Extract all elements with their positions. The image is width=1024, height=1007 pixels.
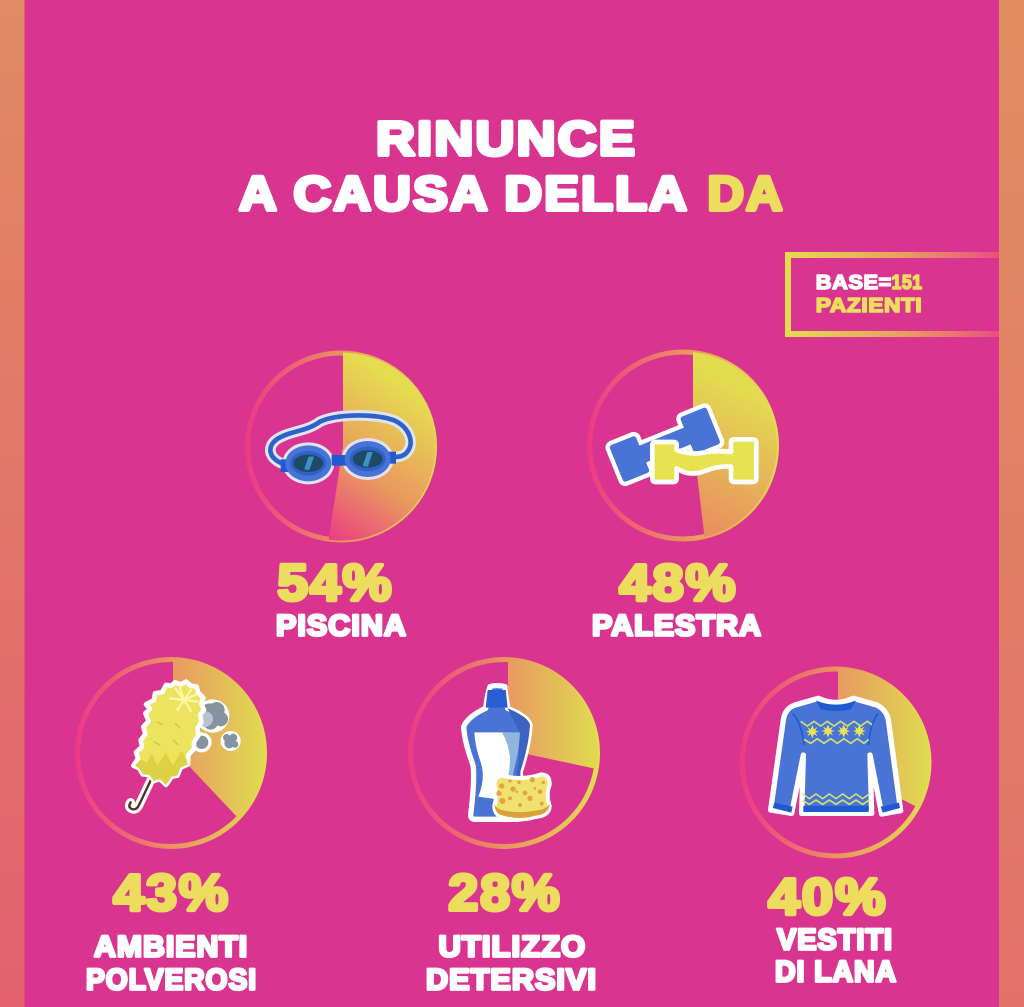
icon: swimming goggles bbox=[270, 415, 411, 484]
label ambienti polverosi bbox=[86, 931, 257, 997]
pie chart 28% bbox=[410, 659, 598, 846]
percentage 28%: 28% bbox=[448, 864, 562, 921]
label utilizzo detersivi: UTILIZZO bbox=[438, 931, 586, 964]
pie chart 43% bbox=[78, 659, 265, 846]
label utilizzo detersivi: DETERSIVI bbox=[426, 964, 597, 997]
panel: ambienti polverosi bbox=[78, 659, 265, 997]
label ambienti polverosi: POLVEROSI bbox=[86, 964, 257, 997]
right side bar bbox=[999, 0, 1024, 1007]
icon: wool sweater bbox=[771, 698, 901, 814]
percentage 43%: 43% bbox=[114, 864, 230, 921]
pie chart 54% bbox=[248, 352, 435, 540]
callout: base pazienti: BASE= bbox=[816, 271, 892, 294]
pie chart 48% bbox=[590, 352, 777, 539]
panel: palestra bbox=[590, 352, 777, 643]
panel: piscina bbox=[248, 352, 435, 643]
label vestiti di lana: DI LANA bbox=[775, 956, 897, 989]
icon: detergent bottle and sponge bbox=[464, 685, 550, 819]
title: RINUNCE bbox=[376, 113, 637, 166]
percentage 48%: 48% bbox=[620, 554, 738, 611]
icon: feather duster bbox=[129, 682, 241, 809]
label ambienti polverosi: AMBIENTI bbox=[94, 931, 248, 964]
percentage 54%: 54% bbox=[278, 554, 394, 611]
label palestra: PALESTRA bbox=[592, 610, 762, 643]
title bbox=[239, 113, 784, 221]
label piscina: PISCINA bbox=[276, 610, 407, 643]
icon: dumbbells bbox=[609, 407, 756, 483]
label vestiti di lana bbox=[775, 924, 897, 989]
left side bar bbox=[0, 0, 24, 1007]
callout: base pazienti bbox=[788, 255, 999, 334]
percentage 40%: 40% bbox=[768, 868, 888, 925]
label utilizzo detersivi bbox=[426, 931, 597, 997]
title: DA bbox=[708, 168, 784, 221]
label vestiti di lana: VESTITI bbox=[777, 924, 893, 957]
panel: vestiti di lana bbox=[742, 668, 929, 989]
pie chart 40% bbox=[742, 668, 929, 856]
panel: utilizzo detersivi bbox=[410, 659, 598, 997]
callout: base pazienti: PAZIENTI bbox=[816, 294, 922, 317]
callout: base pazienti: 151 bbox=[892, 271, 922, 294]
title: A CAUSA DELLA bbox=[239, 168, 689, 221]
